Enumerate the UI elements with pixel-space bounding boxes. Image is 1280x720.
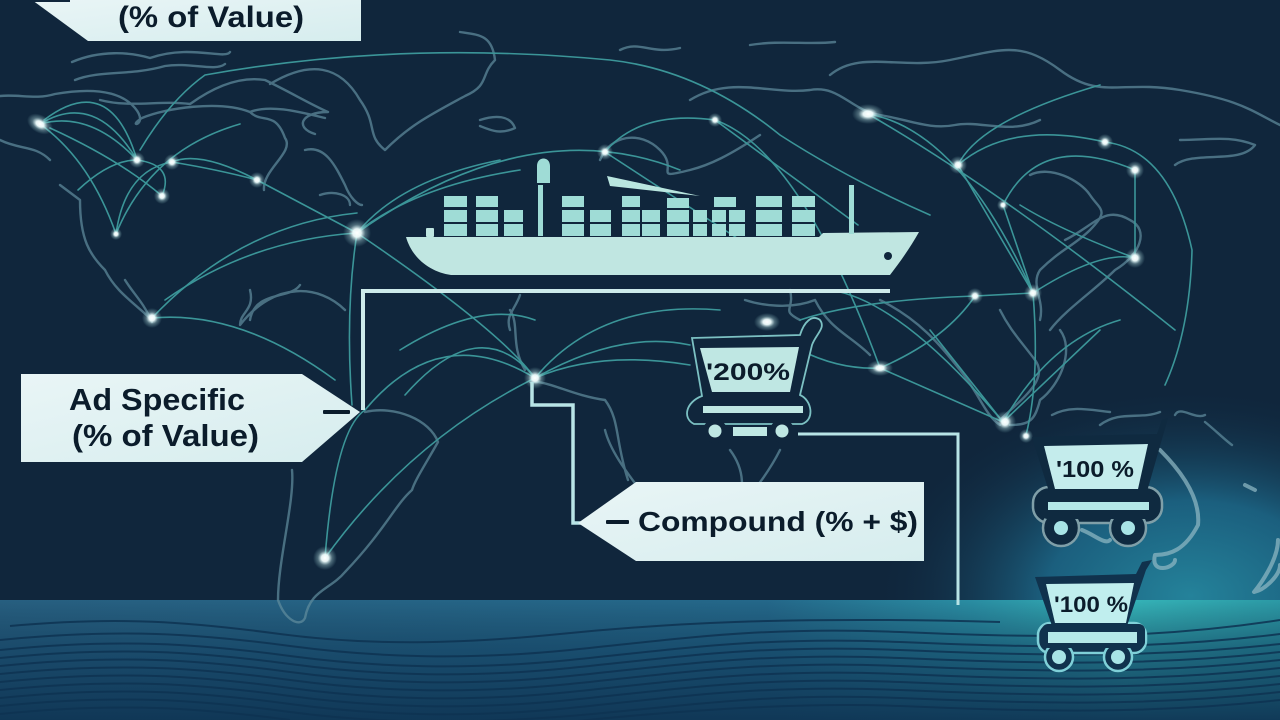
container ship — [406, 158, 919, 275]
bridge tower — [537, 158, 550, 236]
connector: node to compound label — [532, 382, 600, 523]
ocean band — [0, 600, 1280, 720]
mast — [849, 185, 854, 234]
cart: 100% upper — [1032, 418, 1168, 546]
cart: 200%: '200% — [706, 359, 790, 386]
ship hull — [406, 232, 919, 275]
cart: 100% lower: '100 % — [1054, 592, 1128, 617]
label: ad specific: Ad Specific — [69, 382, 245, 417]
label: top % of value: (% of Value) — [118, 1, 304, 34]
label: compound — [578, 482, 924, 561]
cart: 100% upper: '100 % — [1056, 456, 1134, 482]
connector: ship to ad specific label — [363, 291, 890, 410]
cart: 200% — [687, 318, 822, 443]
label: ad specific — [21, 374, 360, 462]
connector: cart to ocean — [798, 434, 958, 605]
label: compound: Compound (% + $) — [638, 506, 918, 537]
route nodes — [23, 104, 1145, 570]
porthole — [884, 252, 892, 260]
cart: 100% lower — [1035, 560, 1152, 671]
crane arm — [607, 176, 700, 196]
containers — [444, 196, 815, 236]
label: ad specific: (% of Value) — [72, 418, 259, 453]
teal glow — [780, 320, 1280, 600]
label: top % of value — [32, 0, 361, 41]
trade route arcs — [40, 53, 1192, 558]
